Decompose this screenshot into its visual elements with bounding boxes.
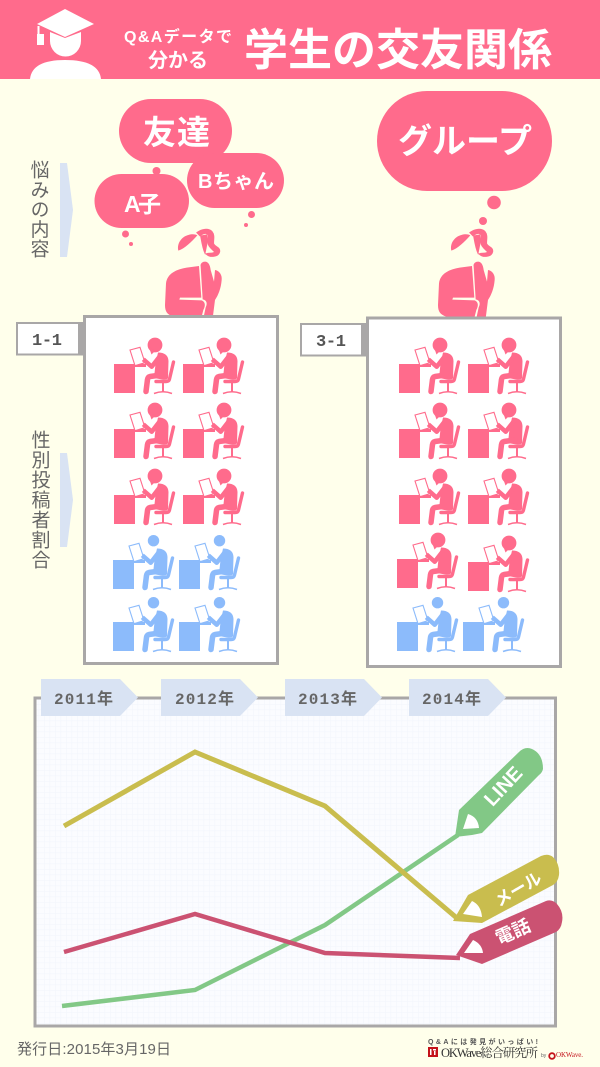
- bubble: A-ko: A子: [124, 191, 161, 217]
- bubble: B-chan: [187, 153, 284, 208]
- pink workers: [397, 338, 528, 592]
- year tab: 2013: 2013年: [298, 689, 357, 709]
- year tab: 2012: 2012年: [175, 689, 234, 709]
- line: LINE: [62, 835, 458, 1006]
- title: 学生の交友関係: [244, 26, 552, 75]
- year tab: 2013: [285, 679, 382, 716]
- year tab: 2014: [409, 679, 506, 716]
- tag: 1-1: 1-1: [32, 332, 62, 351]
- blue workers: [397, 597, 522, 652]
- thought bubbles: left: [94, 99, 284, 246]
- arrow: worries: [60, 163, 73, 257]
- header subtitle: Q&Aデータで: [124, 27, 232, 46]
- thought dots: [122, 167, 255, 246]
- footer: publication date: 発行日:2015年3月19日: [17, 1041, 171, 1058]
- footer: logo: Q&Aには発見がいっぱい!: [428, 1037, 538, 1046]
- pencil label: LINE: LINE: [480, 763, 527, 811]
- year tab: 2014: 2014年: [422, 689, 481, 709]
- bubble: friends: 友達: [143, 114, 210, 151]
- bubble: A-ko: [94, 174, 189, 228]
- year tab: 2012: [161, 679, 258, 716]
- label: gender ratio: 性別投稿者割合: [28, 430, 50, 570]
- pencil label: mail: メール: [491, 868, 545, 910]
- line: phone: [64, 914, 460, 958]
- label: worries: 悩みの内容: [28, 160, 49, 258]
- tag: 3-1: 3-1: [316, 333, 346, 352]
- figure: thinking girl right: [438, 230, 495, 318]
- year tab: 2011: [41, 679, 138, 716]
- icon: graduate with cap: [30, 9, 101, 79]
- panel: line chart: [35, 679, 562, 1026]
- header subtitle: 分かる: [148, 49, 208, 72]
- blue workers: [113, 535, 238, 652]
- footer: logo: by: [541, 1053, 547, 1059]
- pencil label: mail: [453, 855, 559, 923]
- thought bubble: group: グループ: [398, 123, 532, 161]
- header subtitle: [124, 27, 232, 72]
- bubble: friends: [119, 99, 232, 163]
- pencil label: LINE: [455, 748, 543, 837]
- footer: logo: [428, 1037, 583, 1060]
- year tab: 2011: 2011年: [54, 689, 113, 709]
- arrow: gender ratio: [60, 453, 73, 547]
- figure: thinking girl left: [165, 230, 222, 318]
- header band: [0, 0, 600, 79]
- bubble: B-chan: Bちゃん: [198, 170, 274, 193]
- tag: 1-1: [17, 322, 84, 355]
- panel: left gender ratio: [84, 316, 278, 664]
- line: mail: [64, 752, 458, 919]
- pink workers: [114, 338, 242, 524]
- panel: right gender ratio: [368, 318, 560, 666]
- thought bubble: group: [377, 91, 552, 225]
- pencil label: phone: [456, 900, 562, 964]
- footer: logo: OKWave.: [556, 1051, 583, 1059]
- footer: logo: OKWave総合研究所: [441, 1045, 538, 1060]
- tag: 3-1: [301, 323, 367, 356]
- pencil label: phone: 電話: [492, 916, 534, 948]
